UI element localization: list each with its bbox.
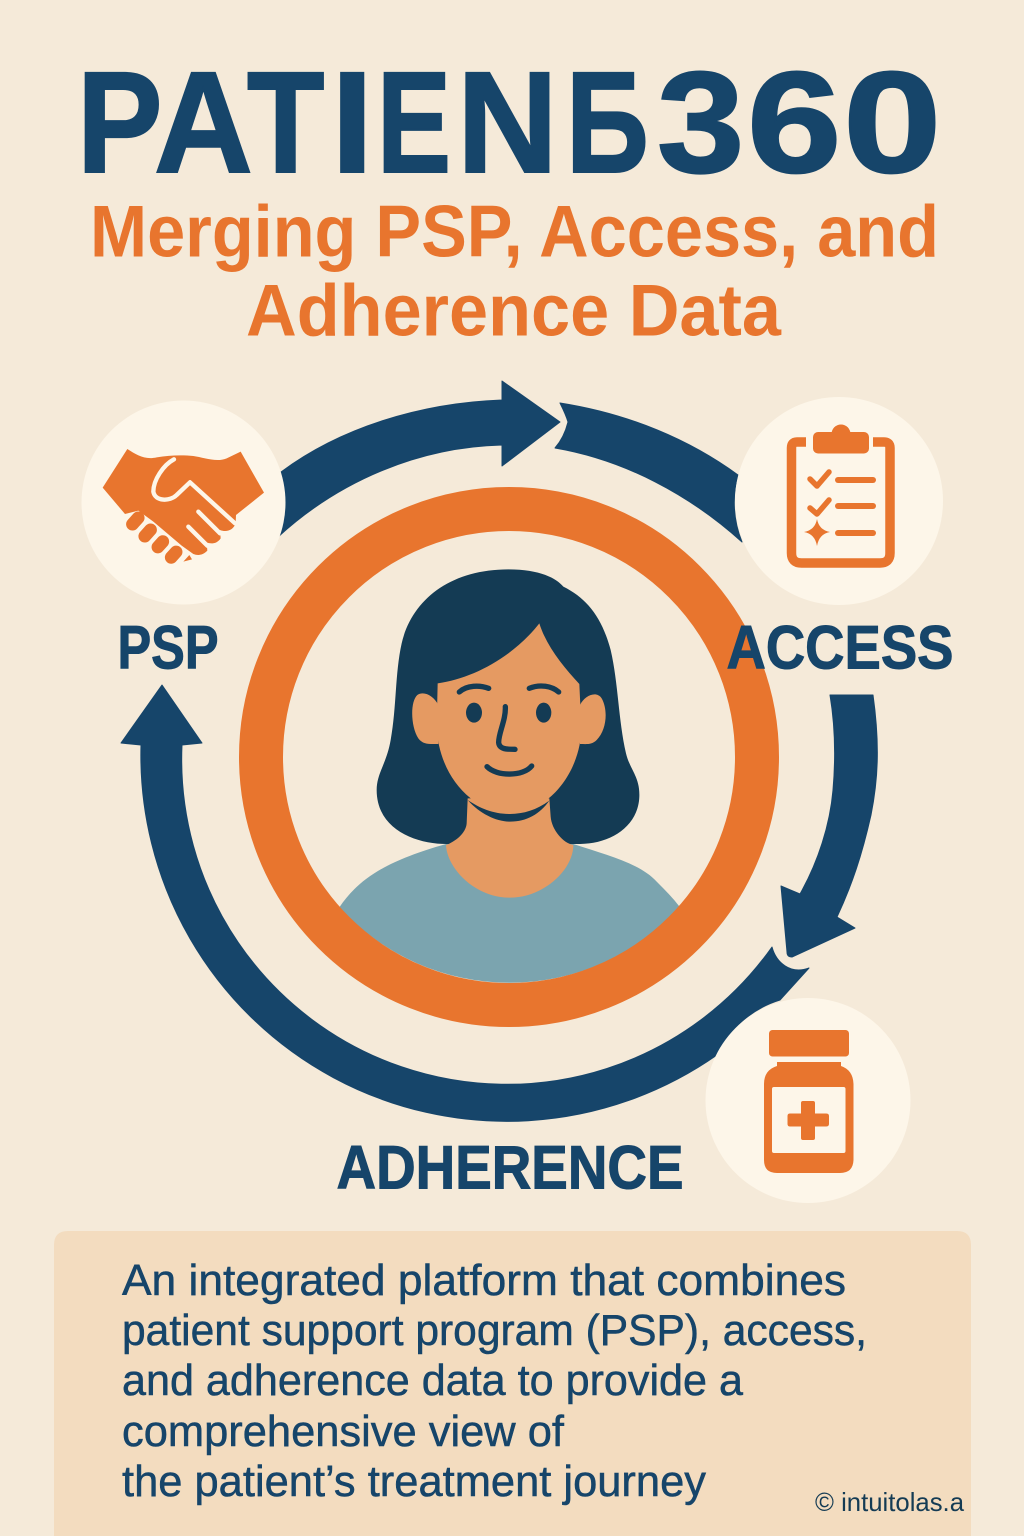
- copyright credit: © intuitolas.a: [815, 1487, 965, 1517]
- Adherence node: [706, 998, 910, 1203]
- title: 3: [657, 42, 744, 203]
- patient illustration: [339, 569, 680, 983]
- subtitle: Adherence Data: [246, 270, 782, 352]
- description text: [122, 1256, 867, 1506]
- title: [77, 41, 942, 203]
- icon: clipboard checklist: [792, 424, 890, 563]
- arrow: Adherence to PSP: [121, 685, 809, 1121]
- circle: PSP: [82, 400, 286, 604]
- subtitle: [90, 192, 939, 352]
- description text: comprehensive view of: [122, 1407, 565, 1456]
- arrow: Access to Adherence (lower segment): [781, 695, 877, 957]
- description text: and adherence data to provide a: [122, 1356, 744, 1405]
- title: P: [77, 42, 162, 203]
- icon: medicine bottle: [764, 1030, 854, 1173]
- arrow: Access to Adherence (upper segment): [555, 403, 742, 542]
- hair: [377, 569, 639, 844]
- title: E: [377, 43, 451, 203]
- jaw shadow: [468, 800, 549, 822]
- title: 0: [843, 43, 942, 203]
- cycle arrows: [121, 381, 877, 1121]
- label: ADHERENCE: ADHERENCE: [336, 1134, 684, 1202]
- title: A: [154, 42, 253, 203]
- description text: patient support program (PSP), access,: [122, 1306, 867, 1355]
- ears: [412, 693, 606, 744]
- title: Б: [566, 42, 649, 203]
- central patient portrait: [261, 509, 757, 1005]
- description text: An integrated platform that combines: [122, 1256, 846, 1305]
- title: N: [457, 43, 558, 203]
- panel background: [54, 1231, 971, 1536]
- circle: Adherence: [706, 998, 910, 1203]
- arrow: PSP to Access: [278, 381, 560, 537]
- circle: Access: [735, 397, 943, 605]
- label: PSP: PSP: [118, 614, 218, 682]
- orange ring: [261, 509, 757, 1005]
- Access node: [735, 397, 943, 605]
- description panel: [54, 1231, 971, 1536]
- facial features: [459, 686, 559, 774]
- shirt: [339, 844, 680, 983]
- label: ACCESS: ACCESS: [726, 614, 954, 682]
- neck: [446, 798, 573, 898]
- PSP node: [82, 400, 286, 604]
- subtitle: Merging PSP, Access, and: [90, 192, 939, 272]
- title: 6: [747, 42, 842, 203]
- title: T: [247, 41, 324, 203]
- description text: the patient’s treatment journey: [122, 1457, 706, 1506]
- face: [437, 623, 581, 813]
- icon: handshake: [103, 449, 264, 566]
- title: I: [331, 43, 373, 203]
